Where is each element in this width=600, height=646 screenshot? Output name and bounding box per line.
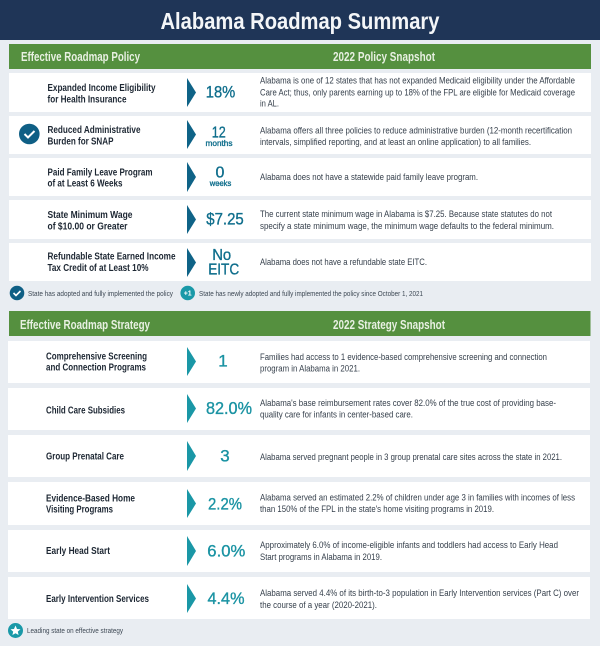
icon: newly adopted +1 bbox=[180, 286, 195, 300]
strategy row: Group Prenatal Care bbox=[8, 435, 590, 477]
strategy row: Child Care Subsidies: 82.0% bbox=[206, 398, 252, 418]
policy row: Paid Family Leave: Alabama does not have a statewide paid family leave program. bbox=[260, 172, 478, 183]
icon: leading state star bbox=[8, 623, 23, 638]
strategy row: Evidence-Based Home Visiting: Visiting Programs bbox=[46, 504, 113, 516]
policy row: State Minimum Wage bbox=[9, 200, 591, 239]
strategy section header: Effective Roadmap Strategy bbox=[20, 318, 150, 332]
strategy row: Evidence-Based Home Visiting: 2.2% bbox=[208, 494, 242, 513]
icon: adopted check bbox=[19, 124, 40, 144]
strategy row: Evidence-Based Home Visiting bbox=[8, 482, 590, 525]
policy row: Reduced Administrative Burden: Reduced Administrative bbox=[48, 125, 141, 136]
strategy row: Early Head Start bbox=[8, 530, 590, 572]
policy section header: Effective Roadmap Policy bbox=[21, 50, 140, 64]
strategy row: Child Care Subsidies: quality care for infants in center-based care. bbox=[260, 410, 413, 420]
title banner: Alabama Roadmap Summary bbox=[160, 8, 440, 34]
policy row: Reduced Administrative Burden bbox=[9, 116, 591, 154]
strategy section header bbox=[9, 311, 590, 336]
policy row: Expanded Income Eligibility bbox=[9, 73, 591, 112]
policy section header bbox=[9, 44, 591, 69]
policy section header: 2022 Policy Snapshot bbox=[333, 50, 436, 64]
strategy section header: 2022 Strategy Snapshot bbox=[333, 318, 446, 332]
policy row: Expanded Income Eligibility: for Health Insurance bbox=[48, 94, 127, 106]
strategy row: Early Head Start: Start programs in Alabama in 2019. bbox=[260, 552, 382, 563]
policy row: State Minimum Wage: $7.25 bbox=[206, 209, 244, 228]
policy row: Expanded Income Eligibility: in AL. bbox=[260, 98, 279, 110]
icon: legend check bbox=[10, 286, 24, 300]
policy legend: State has adopted and fully implemented the policy bbox=[28, 289, 173, 298]
strategy row: Comprehensive Screening: and Connection Programs bbox=[46, 362, 146, 374]
policy row: Paid Family Leave: Paid Family Leave Program bbox=[48, 168, 152, 178]
strategy row: Comprehensive Screening bbox=[8, 341, 590, 383]
policy row: Reduced Administrative Burden: intervals, simplified reporting, and at least an online application) to all families. bbox=[260, 137, 531, 148]
policy legend bbox=[10, 286, 423, 300]
strategy row: Child Care Subsidies bbox=[8, 388, 590, 430]
policy row: Refundable State EITC: EITC bbox=[208, 261, 239, 278]
strategy row: Group Prenatal Care: Group Prenatal Care bbox=[46, 452, 124, 462]
title banner bbox=[0, 0, 600, 40]
policy row: Expanded Income Eligibility: 18% bbox=[206, 82, 235, 101]
policy row: Refundable State EITC: Tax Credit of at Least 10% bbox=[48, 263, 148, 274]
strategy row: Early Intervention Services: the course of a year (2020-2021). bbox=[260, 600, 377, 611]
strategy row: Comprehensive Screening: 1 bbox=[218, 352, 228, 371]
policy legend: State has newly adopted and fully implemented the policy since October 1, 2021 bbox=[199, 289, 423, 298]
policy row: Refundable State EITC: Alabama does not have a refundable state EITC. bbox=[260, 257, 427, 268]
policy row: Reduced Administrative Burden: months bbox=[206, 139, 232, 148]
strategy row: Comprehensive Screening: program in Alabama in 2021. bbox=[260, 364, 360, 374]
strategy row: Early Intervention Services: 4.4% bbox=[208, 589, 244, 608]
strategy row: Child Care Subsidies: Child Care Subsidies bbox=[46, 406, 125, 416]
policy row: Reduced Administrative Burden: 12 bbox=[212, 125, 226, 142]
strategy row: Early Head Start: Early Head Start bbox=[46, 546, 110, 557]
strategy row: Evidence-Based Home Visiting: Evidence-Based Home bbox=[46, 494, 135, 504]
policy row: Paid Family Leave: weeks bbox=[209, 179, 231, 188]
strategy row: Group Prenatal Care: 3 bbox=[220, 447, 230, 466]
strategy row: Early Intervention Services bbox=[8, 577, 590, 619]
strategy legend bbox=[8, 623, 123, 638]
strategy row: Early Intervention Services: Early Intervention Services bbox=[46, 594, 149, 605]
strategy legend: Leading state on effective strategy bbox=[27, 626, 123, 635]
policy row: Paid Family Leave bbox=[9, 158, 591, 196]
policy row: Paid Family Leave: of at Least 6 Weeks bbox=[48, 178, 123, 190]
policy row: Expanded Income Eligibility: Expanded Income Eligibility bbox=[48, 83, 156, 94]
policy row: Refundable State EITC: No bbox=[212, 247, 231, 264]
policy row: State Minimum Wage: of $10.00 or Greater bbox=[48, 222, 128, 232]
policy row: Refundable State EITC: Refundable State Earned Income bbox=[48, 252, 176, 262]
policy row: State Minimum Wage: State Minimum Wage bbox=[48, 210, 133, 221]
icon: newly adopted +1: +1 bbox=[184, 290, 192, 298]
strategy row: Comprehensive Screening: Comprehensive Screening bbox=[46, 352, 147, 362]
strategy row: Early Head Start: 6.0% bbox=[207, 542, 245, 561]
policy row: Reduced Administrative Burden: Burden for SNAP bbox=[48, 136, 114, 148]
strategy row: Evidence-Based Home Visiting: than 150% of the FPL in the state's home visiting programs in 2019. bbox=[260, 504, 494, 515]
policy row: Paid Family Leave: 0 bbox=[216, 165, 225, 182]
policy row: Refundable State EITC bbox=[9, 243, 591, 281]
